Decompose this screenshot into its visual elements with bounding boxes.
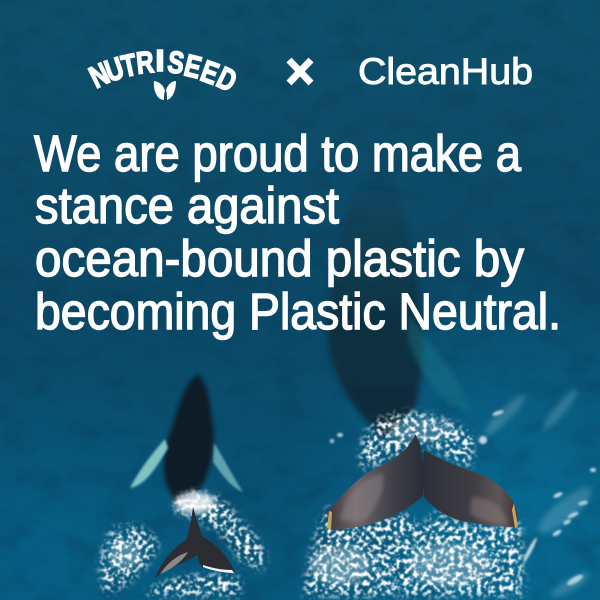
logo wordmark: U [100,50,128,89]
logo wordmark: D [211,60,242,99]
large whale body [327,165,472,438]
headline line 3: ocean-bound plastic by [35,230,524,287]
small whale tail [155,507,235,578]
headline [34,125,561,340]
headline line 2: stance against [35,177,339,234]
foam [101,413,524,596]
logo wordmark: N [84,56,115,95]
logo wordmark: I [155,43,165,78]
logo: Nutriseed [84,43,242,100]
large whale tail [327,434,518,530]
icon: cross between logos [289,60,311,83]
icon: leaf sprout [154,81,176,100]
water shimmer [481,387,597,600]
logo wordmark: T [118,47,140,84]
logo wordmark: E [181,48,205,85]
logo wordmark: E [196,53,223,91]
logo wordmark: S [166,44,186,81]
logo: CleanHub: CleanHub [358,51,533,92]
headline line 1: We are proud to make a [34,125,522,182]
headline line 4: becoming Plastic Neutral. [35,283,561,340]
small whale [130,374,243,508]
sun glints [330,409,596,587]
logo wordmark [84,43,242,99]
logo wordmark: R [135,44,156,81]
